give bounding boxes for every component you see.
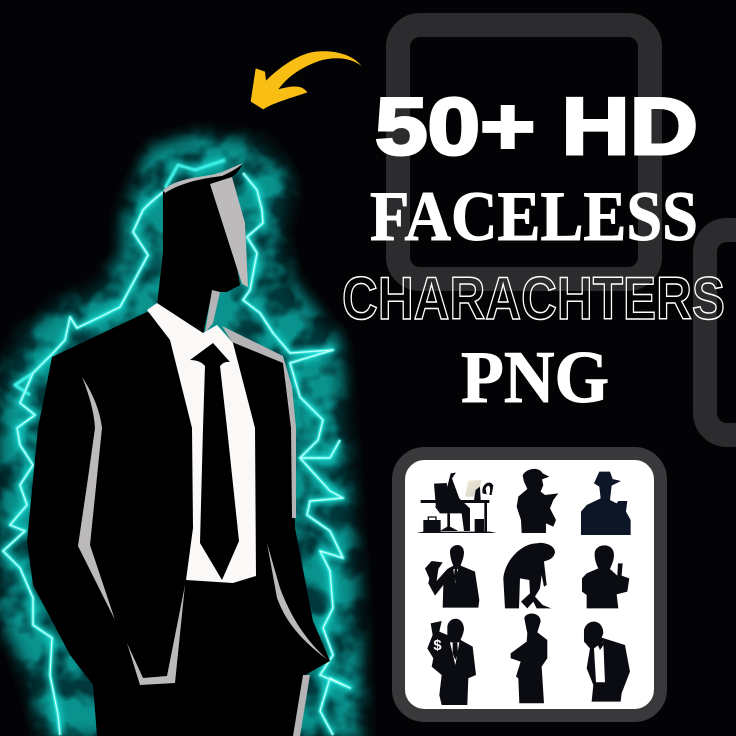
jacket highlight: pocket bbox=[127, 585, 185, 685]
decorative rounded square outline bbox=[398, 25, 650, 279]
white shirt and collar bbox=[147, 303, 256, 583]
icon: man at desk bbox=[417, 473, 497, 533]
icon: man on phone in jacket bbox=[584, 622, 630, 702]
arrow: yellow curved arrow pointing at the head bbox=[251, 51, 362, 109]
heading: 50+ HD: 50+ HD bbox=[375, 82, 698, 172]
neck highlight bbox=[205, 290, 220, 333]
panel: character preview card bbox=[398, 454, 660, 716]
heading: PNG: PNG bbox=[461, 337, 609, 419]
head silhouette bbox=[157, 165, 242, 335]
lightning bolts bbox=[3, 160, 350, 735]
icon: man holding cash bbox=[425, 545, 479, 608]
icon: man with money bag: $ bbox=[433, 638, 441, 654]
icon: man sitting hunched bbox=[503, 543, 555, 608]
necktie bbox=[190, 343, 239, 580]
icon: man with crossed arms bbox=[511, 613, 547, 703]
heading: FACELESS: FACELESS bbox=[370, 178, 698, 256]
face highlight bbox=[210, 177, 248, 287]
icon: man in hat holding phone bbox=[581, 472, 631, 535]
jacket highlight: left lapel bbox=[78, 377, 115, 620]
figure: faceless suited character with cyan lightning aura bbox=[0, 135, 362, 736]
icon: man in cap bbox=[517, 469, 558, 533]
lightning aura glow bbox=[0, 135, 362, 736]
hair highlight bbox=[163, 163, 243, 193]
icon: man with thumb up bbox=[582, 545, 629, 608]
icon: man with money bag bbox=[427, 619, 476, 705]
trouser highlight bbox=[293, 675, 310, 736]
suit jacket silhouette bbox=[27, 312, 330, 736]
jacket highlight: right shoulder bbox=[222, 326, 296, 518]
decorative rounded square outline, right edge bbox=[705, 230, 736, 435]
jacket highlight: right side bbox=[267, 543, 328, 660]
